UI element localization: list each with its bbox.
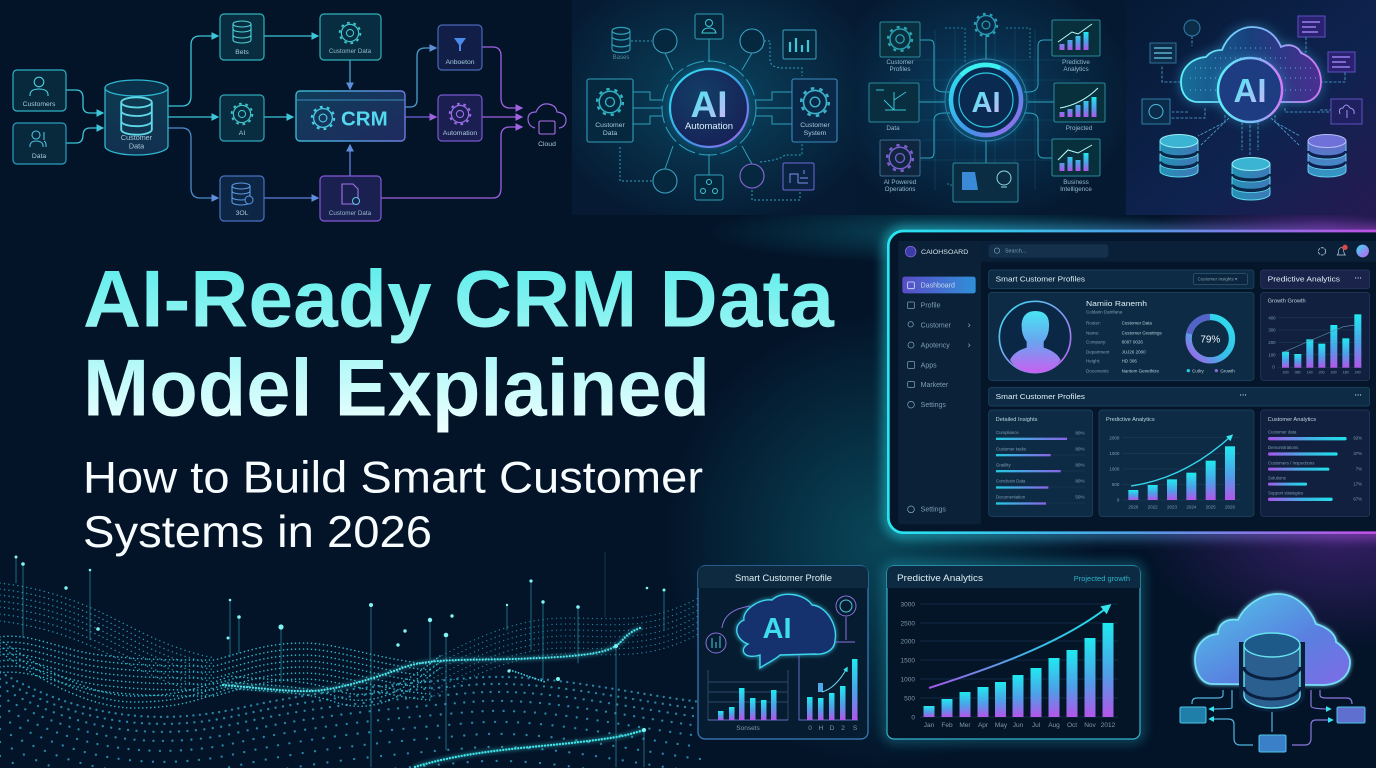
card: customer profile: Coldarin Datrifana bbox=[1086, 310, 1123, 315]
node: Annotation: Anboeton bbox=[445, 59, 475, 66]
left mini chart: Sonsets bbox=[736, 725, 760, 732]
cloud bbox=[1181, 27, 1321, 102]
Projected box bbox=[1054, 83, 1105, 132]
Data box: Data bbox=[886, 125, 900, 132]
right mini chart bbox=[799, 655, 858, 732]
AI circle: AI bbox=[1234, 72, 1266, 109]
AI brain cloud: AI bbox=[762, 613, 792, 645]
database center bbox=[1232, 158, 1270, 200]
Customer System box: System bbox=[804, 130, 827, 137]
x axis labels: Apr bbox=[978, 722, 989, 729]
card: growth chart: 200 bbox=[1319, 370, 1325, 374]
database stack bbox=[1242, 633, 1302, 709]
Customer System box: Customer bbox=[800, 122, 830, 129]
small node boxes bbox=[1180, 707, 1365, 752]
card: customer profile bbox=[989, 292, 1254, 381]
card: predictive analytics chart: 1000 bbox=[1109, 467, 1120, 472]
node: Customer Data bottom: Customer Data bbox=[329, 210, 372, 217]
panel header: Smart Customer Profile bbox=[735, 573, 832, 584]
card: predictive analytics chart: 2024 bbox=[1186, 505, 1197, 510]
card: predictive analytics chart: 2020 bbox=[1128, 505, 1139, 510]
right mini chart: D bbox=[830, 725, 835, 732]
x axis labels: Aug bbox=[1048, 722, 1060, 729]
y axis labels: 500 bbox=[904, 696, 915, 702]
chart header: Predictive Analytics bbox=[897, 573, 983, 584]
chart panel glow bbox=[887, 566, 1140, 739]
Customer Data box: Customer bbox=[595, 122, 625, 129]
header: Smart Customer Profiles 2: ··· bbox=[1240, 391, 1247, 400]
x axis labels: Oct bbox=[1067, 722, 1077, 729]
AI Powered Operations box bbox=[880, 140, 920, 193]
main title bbox=[83, 254, 835, 434]
donut 79%: Cutlry bbox=[1192, 368, 1204, 373]
node: Cloud: Cloud bbox=[538, 141, 556, 148]
sidebar: Settings bbox=[921, 507, 946, 514]
header: Smart Customer Profiles: Customer Insights ▾ bbox=[1198, 277, 1237, 282]
database right bbox=[1308, 134, 1346, 177]
avatar bbox=[999, 301, 1071, 373]
node: Customer Data cylinder: Customer bbox=[121, 133, 153, 142]
card: customer profile: Namiio Ranemh bbox=[1086, 299, 1147, 308]
central AI circle: Automation bbox=[685, 121, 733, 132]
bright filament bbox=[223, 628, 640, 691]
node: AI: AI bbox=[239, 130, 245, 137]
y axis labels bbox=[901, 602, 915, 722]
x axis labels bbox=[924, 722, 1116, 729]
frame bbox=[888, 231, 1376, 533]
bright lower filament bbox=[415, 730, 645, 767]
x axis labels: Jun bbox=[1013, 722, 1024, 729]
profile fields: Nantem Genethize bbox=[1122, 368, 1160, 373]
Customer Data box bbox=[587, 79, 633, 142]
ring connectors bbox=[919, 28, 1054, 185]
header: Smart Customer Profiles: Smart Customer Profiles bbox=[996, 275, 1085, 284]
Business Intelligence box bbox=[1052, 139, 1100, 193]
donut 79%: 79% bbox=[1200, 334, 1220, 345]
profile fields: Department bbox=[1086, 349, 1110, 354]
card: growth chart: 240 bbox=[1355, 370, 1361, 374]
side icons bbox=[706, 596, 856, 653]
database left bbox=[1160, 134, 1198, 177]
header: Smart Customer Profiles 2 bbox=[989, 387, 1370, 406]
card: detailed insights: Gratility bbox=[996, 462, 1012, 467]
database icon bbox=[612, 27, 630, 61]
y axis labels: 1500 bbox=[901, 658, 915, 664]
card: predictive analytics chart: Predictive Analytics bbox=[1106, 417, 1155, 423]
profile fields: Name: bbox=[1086, 330, 1099, 335]
node: Automation bbox=[438, 95, 482, 141]
node: CRM: CRM bbox=[341, 108, 388, 130]
card: predictive analytics chart: 2025 bbox=[1206, 505, 1216, 510]
y axis labels: 2500 bbox=[901, 620, 915, 628]
profile fields: JUJ26 2000 bbox=[1122, 349, 1146, 354]
ambient glow top strip bbox=[700, 200, 1180, 264]
chart header bbox=[887, 566, 1140, 588]
card: growth chart: 200 bbox=[1331, 370, 1337, 374]
lower dot field bbox=[0, 672, 700, 768]
card: detailed insights: Documentation bbox=[996, 495, 1026, 500]
card: customer analytics: Customer Analytics bbox=[1268, 417, 1316, 423]
central AI circle bbox=[668, 67, 750, 149]
profile fields: Customer Greetings bbox=[1122, 330, 1163, 335]
profile fields: Router: bbox=[1086, 321, 1101, 326]
card: growth chart: 200 bbox=[1268, 340, 1276, 345]
Business Intelligence box: Business bbox=[1063, 179, 1089, 186]
node: Bets: Bets bbox=[235, 49, 249, 56]
card: predictive analytics chart: 2022 bbox=[1148, 505, 1158, 510]
cloud panel background bbox=[1126, 0, 1376, 215]
Customer Profiles box: Customer bbox=[886, 59, 914, 66]
central AI ring bbox=[945, 59, 1027, 141]
Predictive Analytics box bbox=[1052, 20, 1100, 73]
card: customer analytics: 67% bbox=[1353, 497, 1362, 502]
profile fields: Company: bbox=[1086, 340, 1106, 345]
Predictive Analytics box: Predictive bbox=[1062, 59, 1090, 66]
central AI ring: AI bbox=[972, 87, 1000, 119]
right mini chart: S bbox=[853, 725, 858, 732]
y axis labels: 1000 bbox=[901, 676, 915, 684]
AI Powered Operations box: AI Powered bbox=[884, 179, 917, 186]
top bar: Search... bbox=[1005, 249, 1026, 255]
node: Customer Data top: Customer Data bbox=[329, 48, 372, 55]
AI circle bbox=[1217, 57, 1283, 123]
card: growth chart: 180 bbox=[1343, 370, 1349, 374]
card: customer analytics bbox=[1261, 410, 1370, 517]
sidebar bbox=[898, 241, 981, 524]
dashboard glow border bbox=[888, 232, 1376, 534]
sidebar: Apotency bbox=[921, 343, 950, 350]
link arrows bbox=[1192, 690, 1352, 745]
card: growth chart: 0 bbox=[1272, 365, 1275, 370]
hub connectors bbox=[620, 39, 802, 200]
node: Data bbox=[13, 123, 66, 164]
node: Customers bbox=[13, 70, 66, 111]
node: SQL: 3OL bbox=[236, 210, 249, 217]
subtitle line 2: Systems in 2026 bbox=[83, 508, 432, 557]
form icon box bbox=[783, 163, 814, 190]
card: predictive analytics chart: 2026 bbox=[1225, 505, 1235, 510]
profile fields bbox=[1086, 321, 1163, 373]
card: growth chart: 300 bbox=[1268, 328, 1276, 333]
node: Automation: Automation bbox=[443, 130, 477, 137]
bottom robot and bulb box bbox=[953, 163, 1018, 202]
node: AI bbox=[220, 95, 264, 141]
Business Intelligence box: Intelligence bbox=[1060, 186, 1092, 193]
card: detailed insights: 80% bbox=[1075, 479, 1085, 484]
x axis labels: Mer bbox=[959, 722, 971, 729]
card: customer analytics: 92% bbox=[1353, 436, 1362, 441]
x axis labels: Jul bbox=[1032, 722, 1041, 729]
sidebar: Apps bbox=[921, 362, 937, 369]
card: detailed insights: Customer tasks bbox=[996, 446, 1026, 451]
card: predictive analytics chart bbox=[1099, 410, 1254, 517]
x axis labels: 2012 bbox=[1101, 722, 1116, 729]
subtitle bbox=[83, 454, 703, 557]
node: Customers: Customers bbox=[23, 101, 56, 108]
card: predictive analytics chart: 500 bbox=[1112, 482, 1120, 487]
connectors bbox=[66, 36, 522, 198]
card: growth chart: 080 bbox=[1295, 370, 1301, 374]
x axis labels: May bbox=[995, 722, 1008, 729]
node: Customer Data cylinder bbox=[105, 80, 168, 155]
header: Smart Customer Profiles 2: Smart Customer Profiles bbox=[996, 392, 1085, 401]
node: Customer Data top bbox=[320, 14, 381, 60]
Projected box: Projected bbox=[1066, 125, 1093, 132]
card: detailed insights bbox=[989, 410, 1093, 517]
card: detailed insights: Conclusin Data bbox=[996, 479, 1026, 484]
database icon: Bases bbox=[613, 55, 629, 61]
header: Smart Customer Profiles 2: ··· bbox=[1355, 391, 1362, 400]
title line 1: AI-Ready CRM Data bbox=[83, 254, 835, 344]
card: growth chart: 400 bbox=[1268, 315, 1276, 320]
profile fields: Customer Data bbox=[1122, 321, 1152, 326]
subtitle line 1: How to Build Smart Customer bbox=[83, 454, 703, 502]
title line 2: Model Explained bbox=[83, 344, 710, 434]
card: predictive analytics chart: 2000 bbox=[1109, 435, 1120, 440]
right mini chart: H bbox=[819, 725, 824, 732]
Customer Profiles box: Profiles bbox=[890, 66, 910, 73]
top bar bbox=[981, 241, 1376, 262]
x axis labels: Jan bbox=[924, 722, 935, 729]
growth arrow bbox=[929, 606, 1109, 688]
chart icon box bbox=[783, 30, 816, 59]
sidebar: Marketer bbox=[921, 382, 949, 389]
panel: Smart Customer Profile bbox=[698, 566, 868, 739]
node: Data: Data bbox=[32, 153, 46, 160]
node: Customer Data bottom bbox=[320, 176, 381, 221]
ring hub background bbox=[856, 0, 1126, 215]
right mini chart: 0 bbox=[808, 725, 812, 732]
bars bbox=[924, 623, 1114, 717]
card: detailed insights: 80% bbox=[1075, 463, 1085, 468]
x axis labels: Feb bbox=[941, 722, 953, 729]
sidebar: Customer bbox=[921, 323, 952, 330]
card: growth chart bbox=[1261, 292, 1370, 381]
card: detailed insights: 50% bbox=[1075, 495, 1085, 500]
panel: AI cloud with databases bbox=[1126, 0, 1376, 215]
profile fields: HD 306 bbox=[1122, 359, 1137, 364]
sidebar: CAIOHSOARD bbox=[921, 249, 969, 256]
ambient glow right of dashboard bbox=[1140, 410, 1376, 650]
card: predictive analytics chart: 2023 bbox=[1167, 505, 1177, 510]
right mini chart: 2 bbox=[841, 725, 845, 732]
chart header: Projected growth bbox=[1074, 574, 1130, 583]
card: customer analytics: Customers / Inspections bbox=[1268, 460, 1314, 465]
node: SQL bbox=[220, 176, 264, 221]
Data box bbox=[869, 83, 919, 132]
top person box bbox=[695, 14, 723, 39]
hub background bbox=[572, 0, 856, 215]
panel: AI ring hub bbox=[856, 0, 1126, 215]
data lines bbox=[1162, 36, 1345, 156]
AI Powered Operations box: Operations bbox=[885, 186, 915, 193]
dotted data wave bbox=[0, 552, 700, 768]
node: Bets bbox=[220, 14, 264, 60]
header: Predictive Analytics bbox=[1261, 270, 1370, 289]
vertical data spikes bbox=[14, 552, 666, 767]
card: detailed insights: 80% bbox=[1075, 447, 1085, 452]
header: Predictive Analytics: Predictive Analytics bbox=[1268, 275, 1340, 284]
Customer Data box: Data bbox=[603, 130, 617, 137]
card: customer analytics: Support strategies bbox=[1268, 490, 1303, 495]
back sheet left bbox=[0, 583, 215, 696]
small icon boxes bbox=[1142, 16, 1362, 124]
donut 79% bbox=[1184, 313, 1236, 373]
y axis labels: 3000 bbox=[901, 602, 915, 608]
profile fields: Documents bbox=[1086, 368, 1109, 373]
card: customer analytics: 37% bbox=[1353, 451, 1362, 456]
top gear bbox=[975, 14, 997, 36]
node: CRM bbox=[296, 91, 405, 141]
card: growth chart: 100 bbox=[1268, 352, 1276, 357]
panel header bbox=[698, 566, 868, 588]
card: growth chart: 200 bbox=[1283, 370, 1289, 374]
card: growth chart: 140 bbox=[1307, 370, 1313, 374]
bottom icon box bbox=[695, 175, 723, 200]
circuit grid bbox=[900, 30, 1080, 190]
satellite circles bbox=[653, 29, 764, 193]
left mini chart bbox=[708, 670, 788, 732]
central AI circle: AI bbox=[690, 84, 728, 125]
panel: AI automation hub bbox=[572, 0, 856, 215]
header: Predictive Analytics: ··· bbox=[1355, 273, 1362, 282]
card: detailed insights: Cumpliance bbox=[996, 430, 1019, 435]
card: customer analytics: 7% bbox=[1356, 466, 1362, 471]
profile fields: 8087 0026 bbox=[1122, 340, 1143, 345]
sidebar: Dashboard bbox=[921, 283, 955, 290]
Customer System box bbox=[792, 79, 837, 142]
card: growth chart: Growth Growth bbox=[1268, 299, 1306, 305]
ambient glow left of dashboard bbox=[660, 310, 1100, 768]
y axis labels: 2000 bbox=[901, 638, 915, 646]
x axis labels: Nov bbox=[1084, 722, 1097, 729]
node: Customer Data cylinder: Data bbox=[129, 142, 144, 150]
right sheet bbox=[430, 597, 700, 698]
card: predictive analytics chart: 0 bbox=[1117, 498, 1120, 503]
short filament bbox=[510, 670, 545, 682]
Customer Profiles box bbox=[880, 22, 920, 73]
profile fields: Height: bbox=[1086, 359, 1100, 364]
card: customer analytics: Demonstrations bbox=[1268, 445, 1298, 450]
dashboard mockup bbox=[888, 231, 1376, 534]
panel: CRM data flow diagram bbox=[13, 14, 566, 221]
ambient purple glow top strip bbox=[1160, 185, 1376, 265]
donut 79%: Growth bbox=[1220, 368, 1235, 373]
Predictive Analytics box: Analytics bbox=[1063, 66, 1089, 73]
card: predictive analytics chart: 1000 bbox=[1109, 451, 1120, 456]
card: customer analytics: Solutions bbox=[1268, 475, 1286, 480]
node: Cloud bbox=[528, 104, 566, 148]
icon: cloud database bbox=[1180, 594, 1365, 752]
card: customer analytics: Customer data bbox=[1268, 430, 1297, 435]
node: Annotation bbox=[438, 25, 482, 70]
cloud shape bbox=[1195, 594, 1350, 685]
y axis labels: 0 bbox=[911, 714, 915, 722]
card: customer analytics: 17% bbox=[1353, 481, 1362, 486]
card: detailed insights: 80% bbox=[1075, 430, 1085, 435]
card: detailed insights: Detailed Insights bbox=[996, 417, 1038, 423]
header: Smart Customer Profiles bbox=[989, 270, 1254, 289]
AI brain cloud bbox=[737, 594, 835, 668]
sidebar: Settings bbox=[921, 402, 946, 409]
middle sheet bbox=[0, 636, 440, 708]
panel: Predictive Analytics chart bbox=[887, 566, 1140, 739]
dashboard inner content bbox=[888, 231, 1376, 533]
sidebar: Profile bbox=[921, 303, 941, 310]
